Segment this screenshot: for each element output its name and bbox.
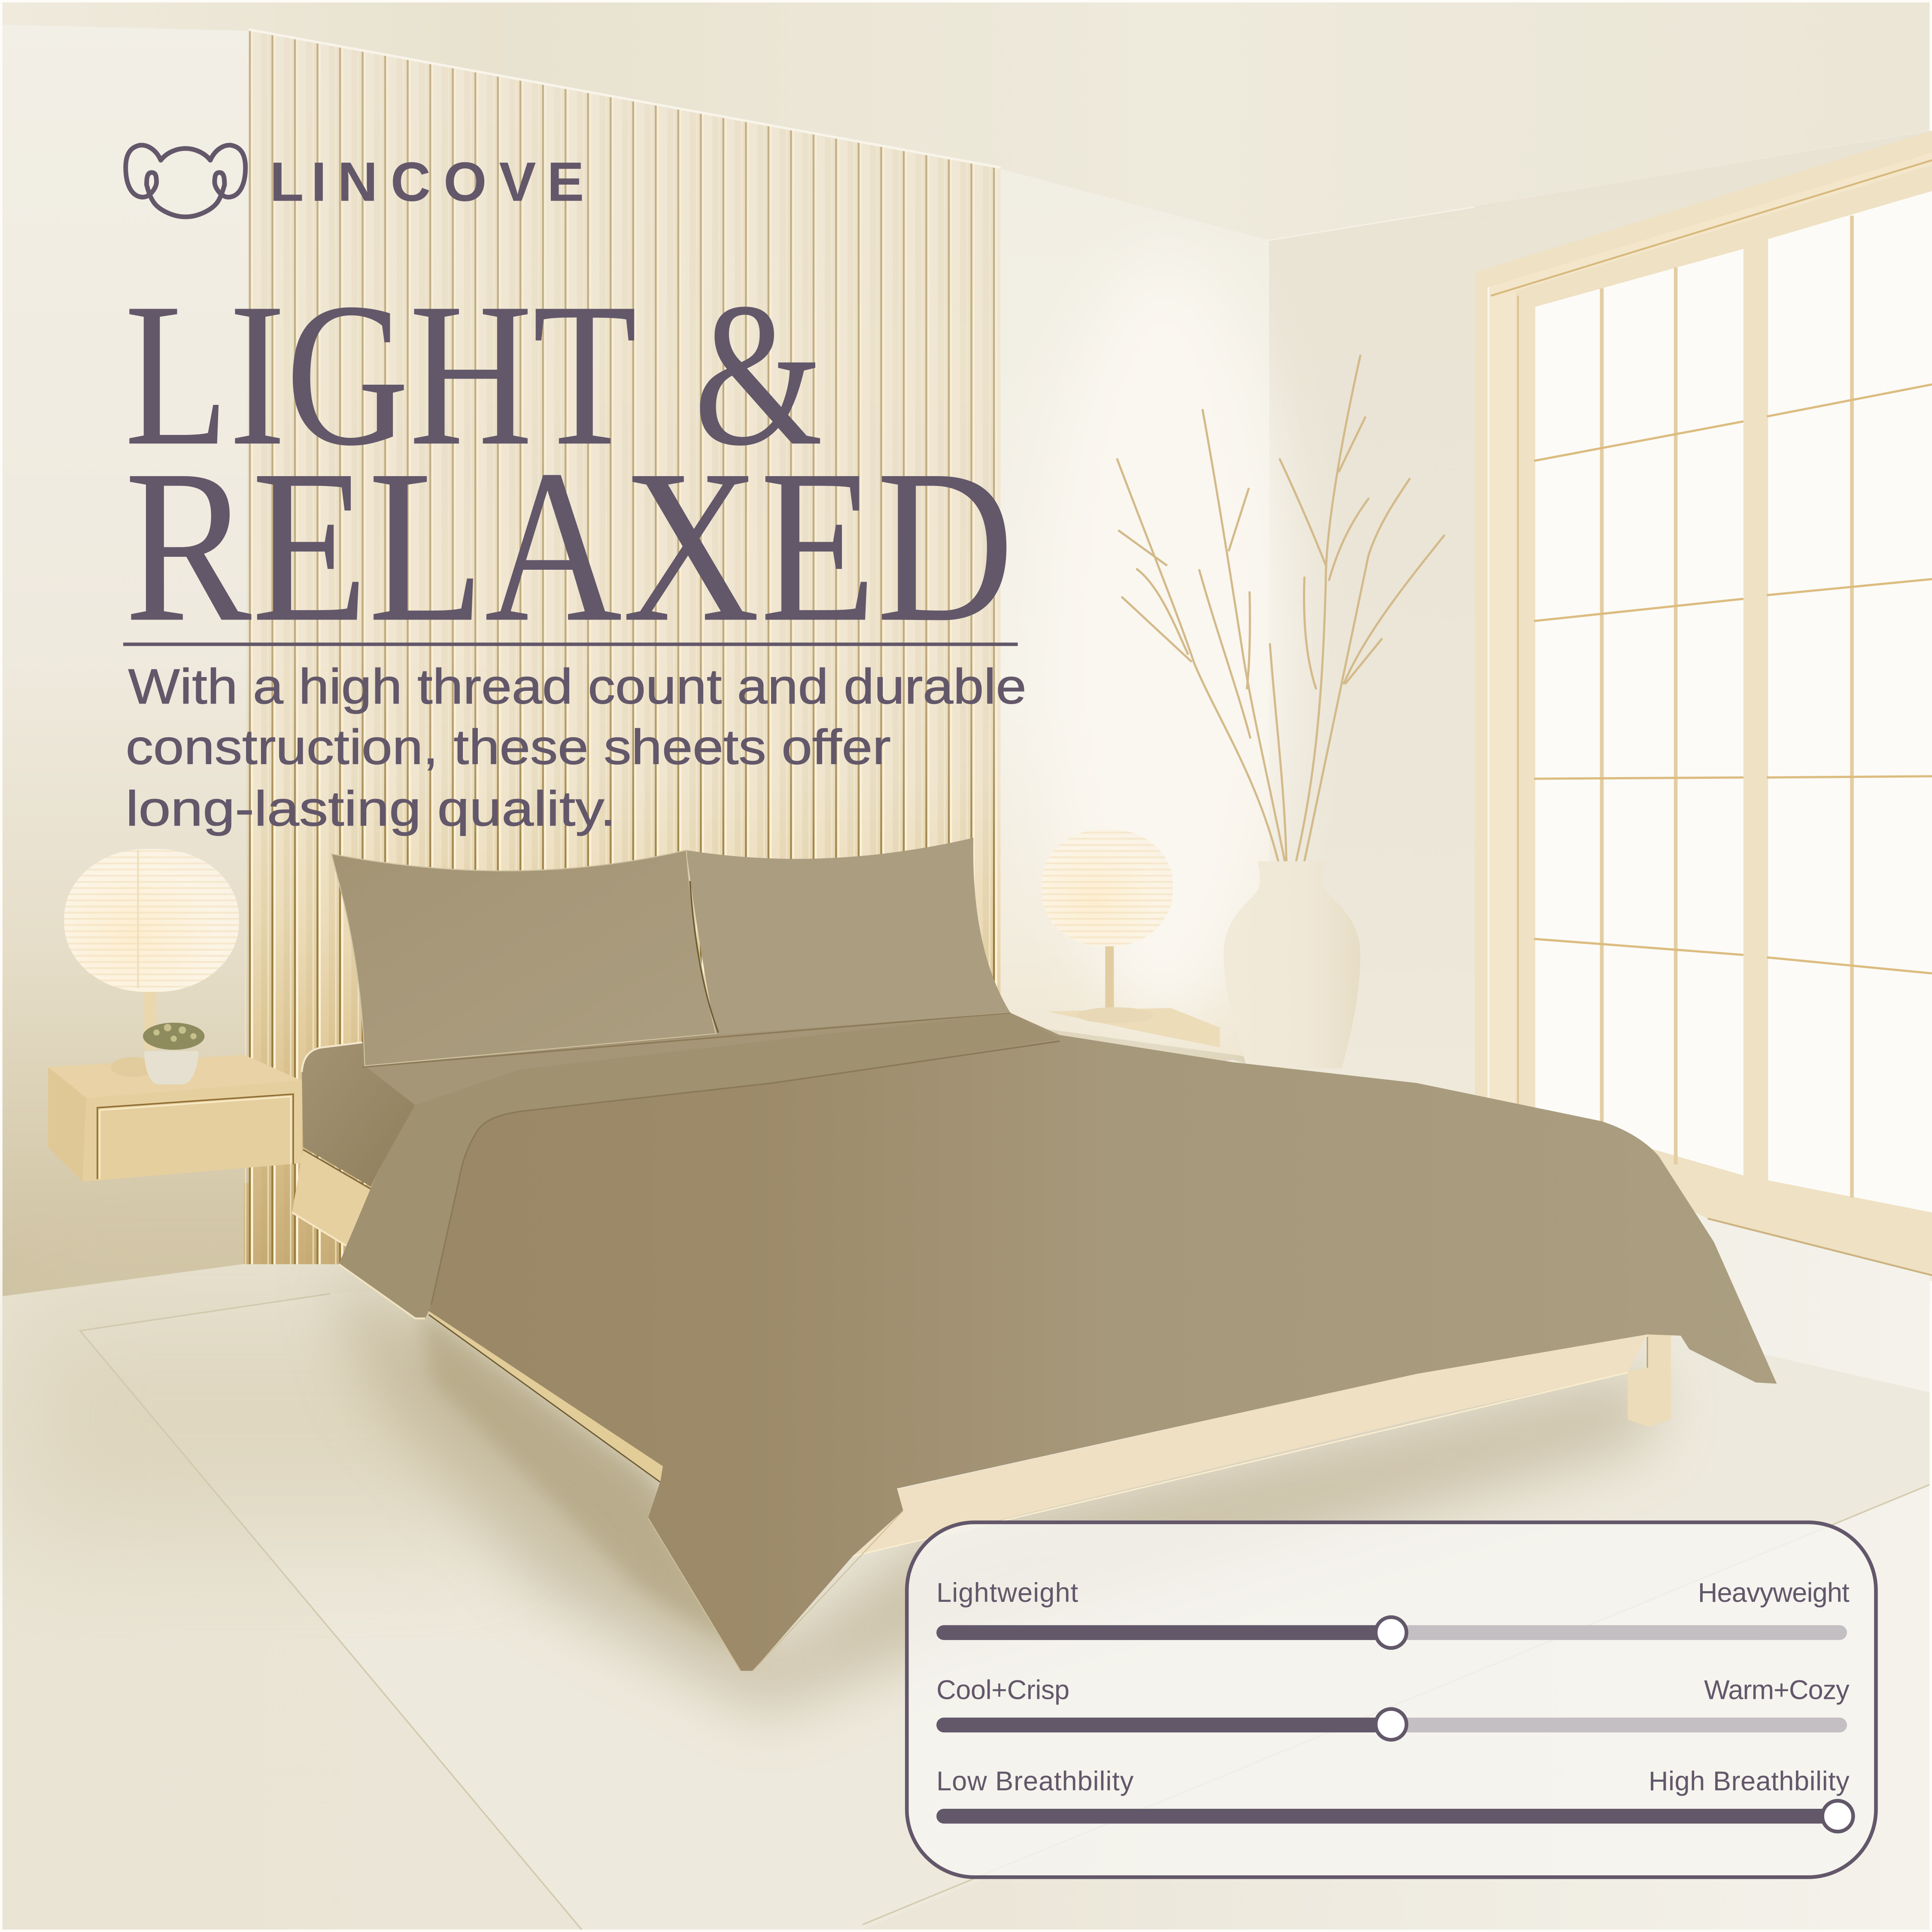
icon: koala head	[126, 145, 246, 217]
slider: cool to warm	[936, 1675, 1850, 1740]
vase with dry branches	[1117, 356, 1444, 1068]
brand logo: Lincove	[126, 145, 584, 217]
body text: construction, these sheets offer	[126, 720, 891, 775]
floor and rug	[3, 1060, 1929, 1929]
slider: lightweight to heavyweight: Heavyweight	[1698, 1578, 1850, 1608]
slider: cool to warm: Warm+Cozy	[1704, 1675, 1850, 1705]
body text	[126, 659, 1027, 836]
slider: lightweight to heavyweight: Lightweight	[936, 1578, 1078, 1608]
left nightstand with lamp and plant	[48, 849, 302, 1182]
panel: attribute sliders	[907, 1522, 1876, 1877]
bed sheets in taupe	[302, 1013, 1777, 1671]
bed frame	[292, 1150, 1671, 1556]
body text: With a high thread count and durable	[128, 659, 1027, 714]
pillows	[331, 838, 1010, 1066]
headline: &	[694, 260, 823, 488]
window with wooden frame	[1475, 131, 1932, 1275]
slider: breathability	[936, 1766, 1853, 1832]
slider: breathability: High Breathbility	[1649, 1766, 1850, 1796]
wordmark: LINCOVE	[270, 151, 584, 213]
slider: lightweight to heavyweight	[936, 1578, 1850, 1648]
headline: RELAXED	[125, 425, 1014, 668]
right lamp and nightstand	[1041, 829, 1220, 1047]
slider: cool to warm: Cool+Crisp	[936, 1675, 1069, 1705]
headline	[125, 260, 1014, 668]
headline: LIGHT	[125, 260, 637, 488]
divider rule under headline	[123, 643, 1018, 646]
body text: long-lasting quality.	[126, 781, 616, 836]
slatted wood headboard panel	[244, 30, 1000, 1264]
slider: breathability: Low Breathbility	[936, 1766, 1134, 1796]
